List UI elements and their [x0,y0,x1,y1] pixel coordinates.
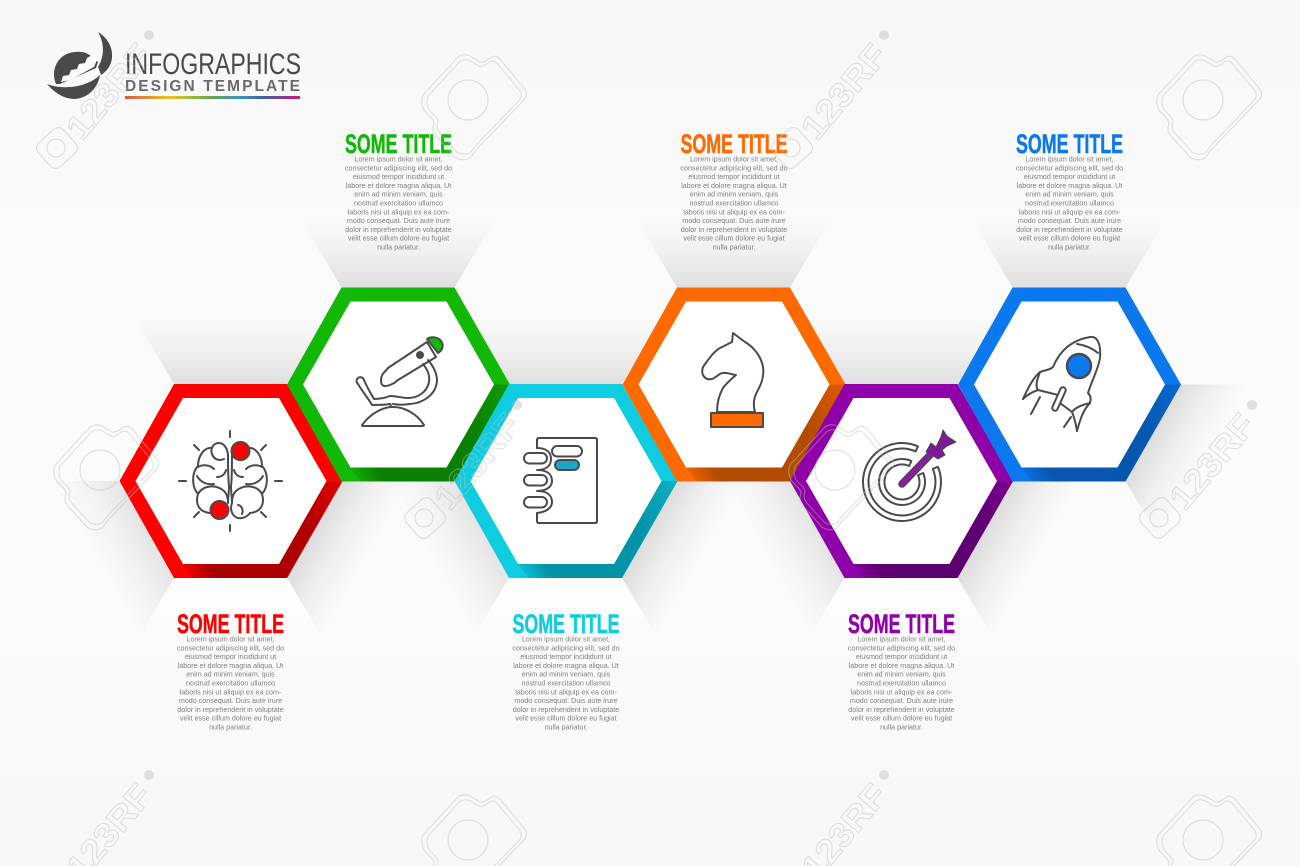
text block: cyan: nostrud exercitation ullamco [522,680,610,688]
text block: blue: consectetur adipiscing elit, sed do [1016,164,1123,172]
text block: orange: laboris nisi ut aliquip ex ea com- [683,208,785,216]
icon: rocket [1023,337,1100,431]
text block: green: velit esse cillum dolore eu fugiat [348,235,449,243]
text block: green: enim ad minim veniam, quis [354,191,443,199]
text block: cyan: laboris nisi ut aliquip ex ea com- [515,688,617,696]
icon: target with arrow [863,430,956,521]
hexagon: red [120,384,342,578]
icon: chess knight [702,333,763,427]
text block: cyan: labore et dolore magna aliqua. Ut [513,662,619,670]
text block: purple: nulla pariatur. [880,724,923,732]
text block: green: nostrud exercitation ullamco [354,200,443,208]
text block: blue: modo consequat. Duis aute irure [1018,217,1121,225]
hexagon shadows [41,220,1260,646]
icon: notebook [524,438,597,523]
text block: cyan: Lorem ipsum dolor sit amet, [522,636,610,644]
logo subtitle: DESIGN TEMPLATE [125,78,300,95]
text block: red: SOME TITLE [177,609,284,639]
text block: orange: nostrud exercitation ullamco [690,200,778,208]
text block: blue: SOME TITLE [1016,129,1123,159]
text block: purple: laboris nisi ut aliquip ex ea com- [851,688,953,696]
text block: red [177,609,284,732]
text block: blue: velit esse cillum dolore eu fugiat [1019,235,1120,243]
hexagon: green [287,288,510,482]
text block: orange: eiusmod tempor incididunt ut [688,173,780,181]
text block: cyan: enim ad minim veniam, quis [522,671,611,679]
text block: red: Lorem ipsum dolor sit amet, [186,636,275,644]
text block: blue: nulla pariatur. [1048,244,1091,252]
text block: purple: consectetur adipiscing elit, sed do [848,644,955,652]
text block: purple: velit esse cillum dolore eu fugiat [851,715,952,723]
text block: red: nulla pariatur. [209,724,252,732]
text block: red: dolor in reprehenderit in voluptate [177,706,284,714]
text block: orange: SOME TITLE [680,129,788,159]
text block: blue: Lorem ipsum dolor sit amet, [1025,156,1114,164]
text block: cyan: modo consequat. Duis aute irure [514,697,618,705]
text block: purple: dolor in reprehenderit in voluptate [848,706,955,714]
text block: orange: enim ad minim veniam, quis [690,191,779,199]
text block: orange: modo consequat. Duis aute irure [682,217,786,225]
text block: green: Lorem ipsum dolor sit amet, [354,156,443,164]
icon: logo emblem [47,32,112,99]
text block: purple: labore et dolore magna aliqua. Ut [849,662,954,670]
text block: green: labore et dolore magna aliqua. Ut [346,182,451,190]
text block: purple: modo consequat. Duis aute irure [850,697,953,705]
text block: blue: laboris nisi ut aliquip ex ea com- [1019,208,1121,216]
text block: cyan: eiusmod tempor incididunt ut [520,653,612,661]
text block: orange [680,129,788,252]
text block: red: eiusmod tempor incididunt ut [185,653,276,661]
text block: blue: eiusmod tempor incididunt ut [1024,173,1115,181]
hexagon: cyan [454,384,678,578]
logo title: INFOGRAPHICS [125,48,301,81]
hexagon: purple [790,384,1013,578]
text block: cyan: consectetur adipiscing elit, sed do [512,644,620,652]
text block: red: modo consequat. Duis aute irure [179,697,282,705]
text block: blue: enim ad minim veniam, quis [1025,191,1114,199]
text block: blue: nostrud exercitation ullamco [1025,200,1114,208]
text block: green: laboris nisi ut aliquip ex ea com- [348,208,450,216]
text block: cyan: nulla pariatur. [545,724,587,732]
text block: green: eiusmod tempor incididunt ut [353,173,444,181]
icon: microscope [357,337,443,426]
text block: cyan: SOME TITLE [512,609,620,639]
text block: red: consectetur adipiscing elit, sed do [177,644,284,652]
text block: red: labore et dolore magna aliqua. Ut [178,662,283,670]
text block: purple [848,609,955,732]
text block: orange: velit esse cillum dolore eu fugiat [683,235,785,243]
text block: blue: dolor in reprehenderit in voluptate [1016,226,1123,234]
text block: orange: consectetur adipiscing elit, sed do [680,164,788,172]
text block: cyan: dolor in reprehenderit in voluptate [513,706,619,714]
text block: purple: SOME TITLE [848,609,955,639]
text block: green: consectetur adipiscing elit, sed do [345,164,452,172]
text block: green: SOME TITLE [345,129,452,159]
text block: red: laboris nisi ut aliquip ex ea com- [180,688,282,696]
text block: red: nostrud exercitation ullamco [186,680,275,688]
text block: orange: dolor in reprehenderit in voluptate [681,226,787,234]
watermark overlay: 123RF [427,407,528,517]
text block: green: nulla pariatur. [377,244,420,252]
watermark overlay: 123RF [1162,407,1263,517]
text block: orange: labore et dolore magna aliqua. Ut [681,182,787,190]
text block: green: dolor in reprehenderit in voluptate [345,226,452,234]
text block: blue [1016,129,1123,252]
text block: green: modo consequat. Duis aute irure [347,217,450,225]
watermark overlay: 123RF [794,37,895,147]
text block: green [345,129,452,252]
hexagon: blue [958,288,1181,482]
text block: purple: enim ad minim veniam, quis [857,671,946,679]
text block: purple: Lorem ipsum dolor sit amet, [857,636,946,644]
text block: cyan: velit esse cillum dolore eu fugiat [515,715,617,723]
logo [47,32,301,99]
hexagon: orange [622,288,846,482]
watermark overlay: 123RF [59,37,160,147]
text block: purple: nostrud exercitation ullamco [857,680,946,688]
text block: cyan [512,609,620,732]
text block: red: enim ad minim veniam, quis [186,671,275,679]
text block: blue: labore et dolore magna aliqua. Ut [1017,182,1122,190]
text block: orange: Lorem ipsum dolor sit amet, [690,156,778,164]
text block: purple: eiusmod tempor incididunt ut [856,653,947,661]
icon: brain [179,431,282,531]
rainbow bar [125,96,300,99]
text block: orange: nulla pariatur. [713,244,755,252]
text block: red: velit esse cillum dolore eu fugiat [180,715,281,723]
